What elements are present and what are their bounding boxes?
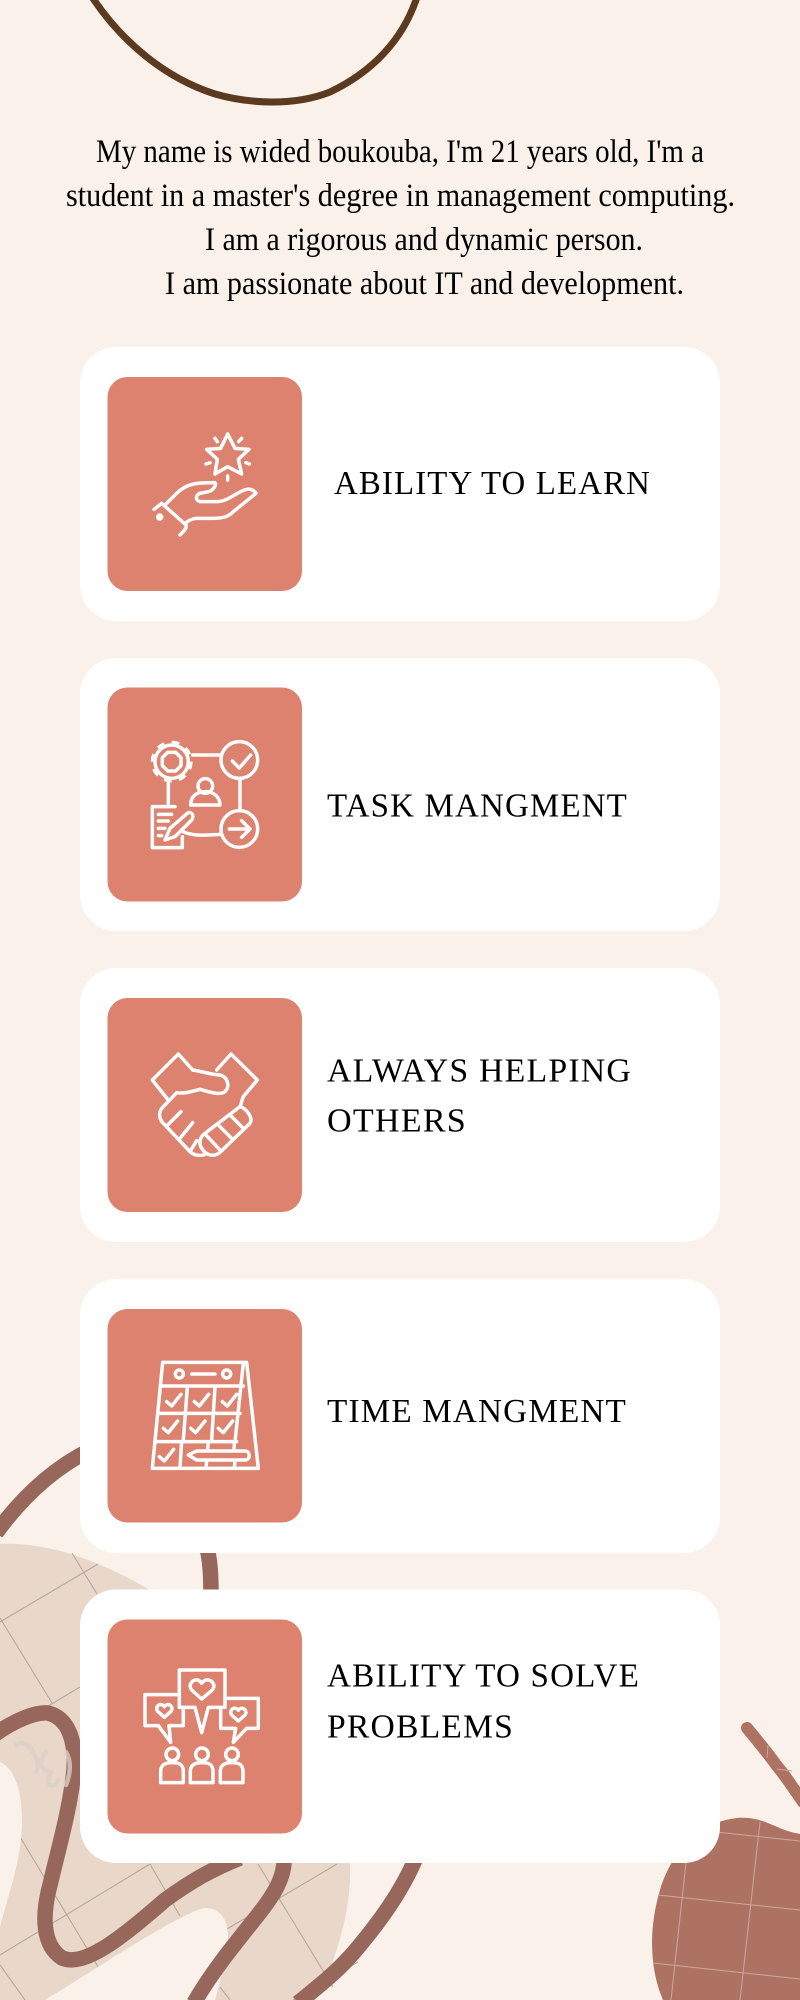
icon tile: people with heart bubbles: [108, 1620, 302, 1834]
card: task management: [80, 658, 720, 931]
intro paragraph: student in a master's degree in management computing.: [66, 178, 735, 214]
card title: [327, 1052, 632, 1140]
decorative beige blob with grid: [0, 1544, 358, 2000]
card title: TASK MANGMENT: [327, 788, 628, 824]
icon tile: handshake: [108, 998, 302, 1212]
card title: OTHERS: [327, 1102, 467, 1140]
card title: ABILITY TO LEARN: [334, 465, 651, 502]
card title: ABILITY TO SOLVE: [327, 1658, 640, 1694]
decorative watermark scribble: [16, 1743, 70, 1785]
icon tile: calendar: [108, 1309, 302, 1522]
top brown arc: [92, 0, 417, 102]
intro paragraph: I am a rigorous and dynamic person.: [205, 222, 643, 258]
card: time management: [80, 1279, 720, 1553]
intro paragraph: [66, 134, 735, 302]
card title: PROBLEMS: [327, 1708, 514, 1746]
decorative terracotta leaf: [652, 1728, 800, 2000]
card: ability to learn: [80, 347, 720, 621]
decorative brown ribbons: [0, 1450, 417, 2000]
card title: [327, 1658, 640, 1746]
icon tile: task workflow: [108, 688, 302, 902]
card: always helping others: [80, 968, 720, 1242]
card: ability to solve problems: [80, 1590, 720, 1863]
card title: TIME MANGMENT: [327, 1393, 627, 1430]
intro paragraph: My name is wided boukouba, I'm 21 years old, I'm a: [96, 134, 704, 170]
icon tile: hand with star: [108, 377, 302, 591]
card title: ALWAYS HELPING: [327, 1052, 632, 1090]
intro paragraph: I am passionate about IT and development.: [165, 266, 684, 302]
